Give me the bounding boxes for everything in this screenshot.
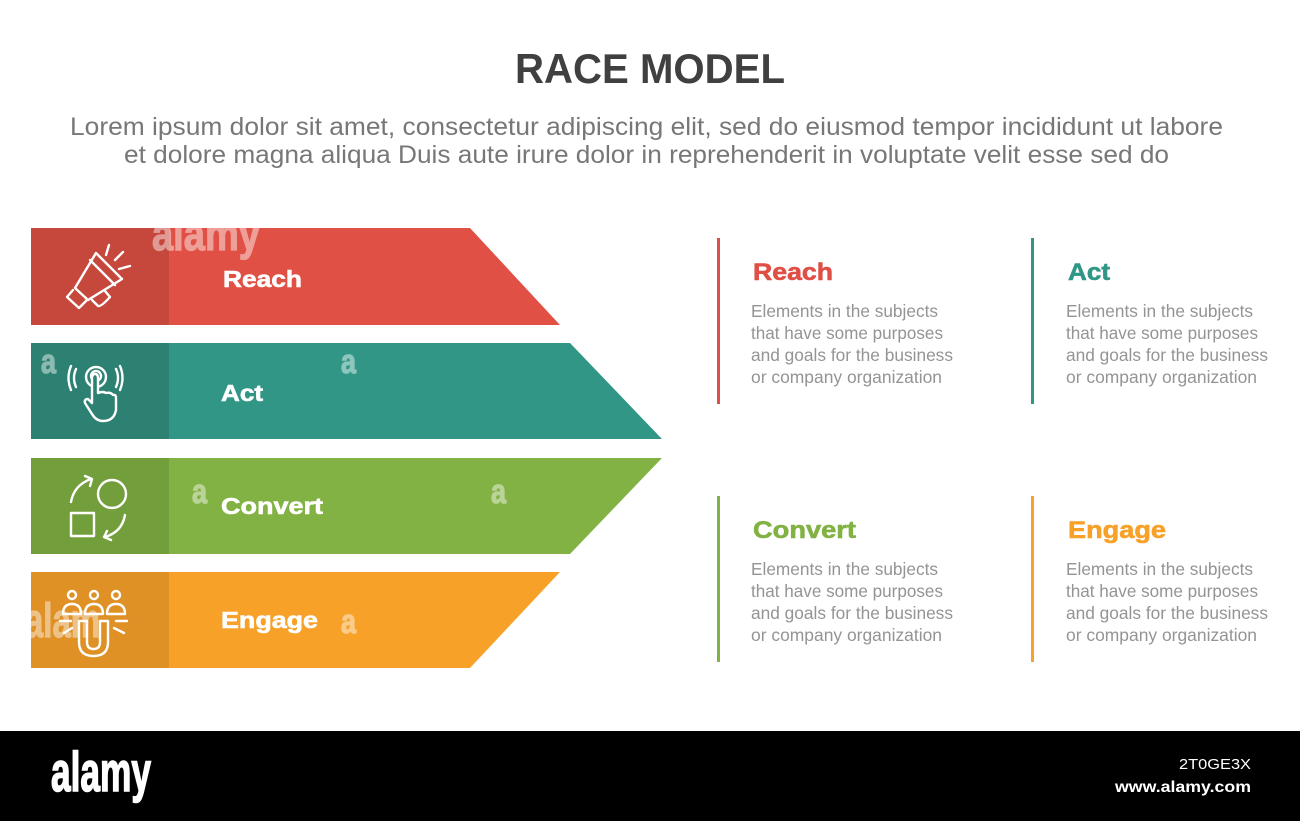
label: Reach: Reach <box>223 266 302 292</box>
heading: Act: Act <box>1068 259 1110 286</box>
icon: tapping hand <box>68 366 122 421</box>
footer logo: alamy <box>51 740 151 803</box>
text block: Reach body: that have some purposes <box>751 323 943 343</box>
watermark fragments <box>25 208 507 648</box>
icon: people and magnet <box>60 591 127 656</box>
title: RACE MODEL <box>515 45 785 92</box>
text block: Act body <box>1066 301 1268 387</box>
watermark fragments: a <box>341 343 357 381</box>
panel: Reach arrow bar <box>31 228 560 325</box>
text block: Engage body: that have some purposes <box>1066 581 1258 601</box>
watermark fragments: alamy <box>152 208 260 260</box>
heading: Reach: Reach <box>753 259 833 286</box>
text block: Act body: Elements in the subjects <box>1066 301 1253 321</box>
panel: Convert arrow bar <box>31 458 662 554</box>
panel: Engage description <box>1031 496 1268 662</box>
panel: Reach description <box>717 238 953 404</box>
icon: cycle of shapes <box>71 476 126 540</box>
panel: Convert description <box>717 496 953 662</box>
subtitle text block <box>70 113 1223 169</box>
panel: Act arrow bar <box>31 343 662 439</box>
text block: Convert body <box>751 559 953 645</box>
text block: Convert body: that have some purposes <box>751 581 943 601</box>
text block: Reach body: and goals for the business <box>751 345 953 365</box>
subtitle text block: et dolore magna aliqua Duis aute irure dolor in reprehenderit in voluptate velit esse sed do <box>124 141 1169 169</box>
text block: Engage body <box>1066 559 1268 645</box>
panel: Act description <box>1031 238 1268 404</box>
text block: Act body: and goals for the business <box>1066 345 1268 365</box>
label: Act: Act <box>221 380 263 406</box>
watermark fragments: a <box>491 473 507 511</box>
text block: Act body: or company organization <box>1066 367 1257 387</box>
text block: Reach body: Elements in the subjects <box>751 301 938 321</box>
text block: Reach body: or company organization <box>751 367 942 387</box>
subtitle text block: Lorem ipsum dolor sit amet, consectetur adipiscing elit, sed do eiusmod tempor incididunt ut labore <box>70 113 1223 141</box>
text block: Reach body <box>751 301 953 387</box>
watermark fragments: a <box>41 343 57 381</box>
label: Convert: Convert <box>221 493 323 519</box>
text block: Engage body: and goals for the business <box>1066 603 1268 623</box>
heading: Engage: Engage <box>1068 517 1166 544</box>
watermark fragments: a <box>192 473 208 511</box>
text block: Convert body: or company organization <box>751 625 942 645</box>
label: Engage: Engage <box>221 607 318 633</box>
footer url: www.alamy.com <box>1114 779 1251 796</box>
watermark fragments: a <box>341 603 357 641</box>
watermark fragments: alam <box>25 595 100 648</box>
panel: Engage arrow bar <box>31 572 560 668</box>
text block: Engage body: or company organization <box>1066 625 1257 645</box>
text block: Convert body: Elements in the subjects <box>751 559 938 579</box>
image id: 2T0GE3X <box>1179 756 1251 773</box>
text block: Act body: that have some purposes <box>1066 323 1258 343</box>
heading: Convert: Convert <box>753 517 856 544</box>
text block: Engage body: Elements in the subjects <box>1066 559 1253 579</box>
footer bar <box>0 731 1300 821</box>
text block: Convert body: and goals for the business <box>751 603 953 623</box>
icon: megaphone <box>67 245 130 308</box>
